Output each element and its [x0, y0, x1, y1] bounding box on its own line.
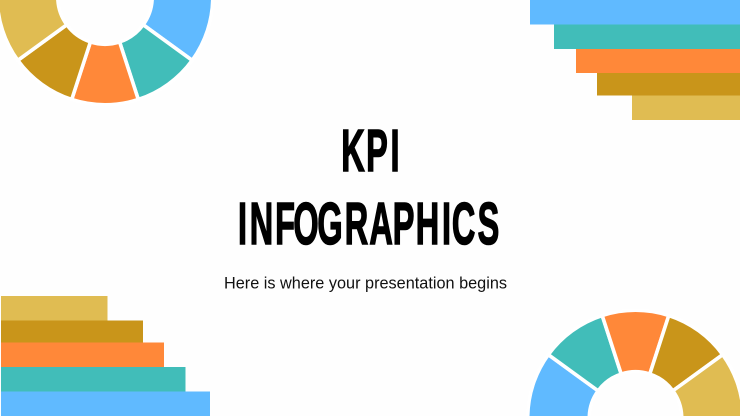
- segment: yellow: [0, 0, 67, 60]
- subtitle: Here is where your presentation begins: [224, 274, 507, 292]
- bar: teal: [554, 24, 740, 49]
- donut chart: bottom right: [528, 310, 740, 416]
- segment: dark gold: [650, 315, 723, 391]
- segment: yellow: [673, 355, 740, 416]
- bar: teal: [1, 367, 186, 392]
- donut chart: top left: [0, 0, 213, 105]
- title: [238, 119, 499, 258]
- stacked bars: top right: [530, 0, 740, 120]
- bar: yellow: [632, 96, 740, 120]
- bar: blue: [1, 392, 210, 416]
- title line 2: INFOGRAPHICS: [238, 192, 499, 258]
- segment: orange: [602, 310, 669, 374]
- segment: teal: [120, 25, 192, 100]
- bar: dark gold: [597, 73, 740, 96]
- bar: orange: [1, 342, 164, 367]
- stacked bars: bottom left: [1, 296, 210, 416]
- segment: blue: [528, 355, 598, 416]
- segment: teal: [548, 315, 621, 391]
- segment: dark gold: [18, 25, 90, 100]
- segment: blue: [143, 0, 213, 60]
- title line 1: KPI: [341, 119, 400, 185]
- bar: yellow: [1, 296, 108, 320]
- segment: orange: [72, 42, 138, 105]
- bar: blue: [530, 0, 740, 24]
- bar: dark gold: [1, 320, 143, 342]
- bar: orange: [576, 49, 740, 73]
